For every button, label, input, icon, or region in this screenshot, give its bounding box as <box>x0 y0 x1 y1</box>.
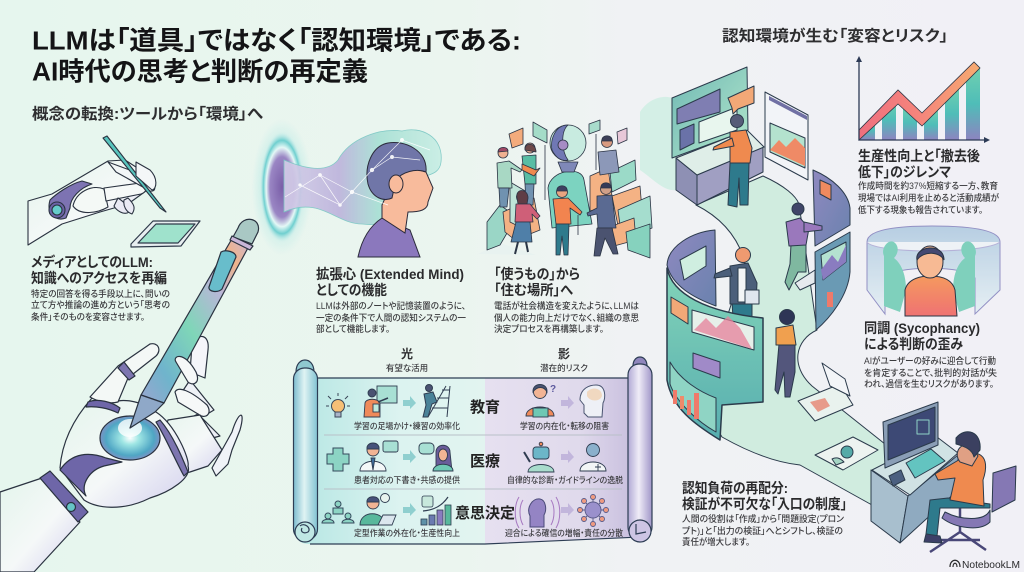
text: cognitive load redistribution: 責任が増大します。 <box>682 536 750 547</box>
chart: productivity zigzag with bars <box>856 56 990 143</box>
icon: echo head <box>515 497 560 528</box>
text: from using to living: 個人の能力向上だけでなく、組織の意思 <box>494 312 639 323</box>
panel: scroll comparing light and shadow <box>294 357 652 544</box>
text: decision label: 意思決定 <box>455 504 515 522</box>
person: walking <box>785 203 822 290</box>
text: extended mind: LLMは外部のノートや記憶装置のように、 <box>316 300 466 311</box>
text: from using to living: 電話が社会構造を変えたように、LLMは <box>494 300 639 311</box>
icon: reader with question <box>526 384 556 417</box>
icon: person surrounded by echo ring <box>867 226 1000 316</box>
text: cognitive load redistribution: 人間の役割は「作成」から「問題設定(プロン <box>682 513 844 524</box>
curved panel: left lower <box>667 268 763 440</box>
logo: NotebookLM: NotebookLM <box>962 559 1020 571</box>
caption: medicine shadow: 自律的な診断・ガイドラインの逸脱 <box>507 475 623 485</box>
person: woman with folder <box>714 248 759 318</box>
icon: medical cross <box>327 448 349 471</box>
icon: small robot hand with stylus <box>28 136 166 245</box>
icon: climbing ladder <box>423 384 450 417</box>
right heading: 認知環境が生む「変容とリスク」 <box>722 26 948 45</box>
text: sycophancy: AIがユーザーの好みに迎合して行動 <box>864 355 996 366</box>
icon: light bulb <box>326 393 350 417</box>
mint wisp <box>640 97 676 190</box>
icon: teacher at board <box>364 386 397 417</box>
text: cognitive load redistribution: 検証が不可欠な「入口の制度」 <box>682 496 847 512</box>
text: extended mind: 部として機能します。 <box>316 323 390 334</box>
side table <box>795 270 815 290</box>
person: operator seated in chair <box>924 432 1016 552</box>
title: AI時代の思考と判断の再定義 <box>32 56 368 86</box>
arrow <box>403 396 416 409</box>
column headings: light and shadow <box>386 346 588 373</box>
column headings: light and shadow: 潜在的リスク <box>540 363 588 373</box>
document on platform <box>798 363 853 421</box>
text: extended mind <box>316 266 466 334</box>
icon: patient with speech bubble <box>419 443 453 471</box>
text: productivity dilemma <box>858 148 999 215</box>
text: extended mind: 一定の条件下で人間の認知システムの一 <box>316 312 466 323</box>
curved panel: right side upper <box>813 170 850 246</box>
text: medicine label: 医療 <box>470 453 500 470</box>
column headings: light and shadow: 有望な活用 <box>386 363 428 373</box>
walkway floor <box>696 176 890 505</box>
text: media as LLM: 立て方や推論の進め方という「思考の <box>31 299 170 310</box>
curved panel: right side lower <box>815 232 850 330</box>
text: media as LLM: 条件」そのものを変容させます。 <box>31 311 145 322</box>
text: productivity dilemma: 低下」のジレンマ <box>858 164 951 180</box>
icon: robot diagnosing <box>524 442 554 472</box>
arrow <box>561 450 574 463</box>
text: from using to living: 決定プロセスを再構築します。 <box>494 323 604 334</box>
text: sycophancy <box>864 320 997 389</box>
text: sycophancy: われ、過信を生むリスクがあります。 <box>864 378 994 389</box>
icon: worker with laptop and gear <box>360 494 396 525</box>
icon: doctor with speech bubble <box>360 441 398 471</box>
icon: people in an AI environment <box>478 120 652 258</box>
text: sycophancy: 同調 (Sycophancy) <box>864 320 980 336</box>
row: education <box>326 384 609 431</box>
column headings: light and shadow: 影 <box>558 347 570 361</box>
scroll right roller <box>628 357 652 542</box>
caption: education light: 学習の足場かけ・練習の効率化 <box>354 421 460 431</box>
caption: education shadow: 学習の内在化・転移の阻害 <box>520 421 609 431</box>
icon: portal with neural flow into head <box>252 119 441 257</box>
text: sycophancy: による判断の歪み <box>864 336 963 352</box>
icon: reader with question: ? <box>550 384 556 395</box>
text: productivity dilemma: 生産性向上と「撤去後 <box>858 148 980 164</box>
title <box>32 26 521 86</box>
text: media as LLM: 知識へのアクセスを再編 <box>31 270 167 286</box>
text: from using to living <box>494 266 639 334</box>
arrow <box>403 450 416 463</box>
text: cognitive load redistribution: プト)」と「出力の検証」へとシフトし、検証の <box>682 525 843 536</box>
text: productivity dilemma: 現場ではAI利用を止めると活動成績が <box>858 192 999 203</box>
title: LLMは「道具」ではなく「認知環境」である: <box>32 26 521 56</box>
text: cognitive load redistribution <box>682 480 847 547</box>
text: from using to living: 「使うもの」から <box>494 266 580 282</box>
person: woman walking <box>775 310 796 397</box>
text: productivity dilemma: 作成時間を約37%短縮する一方、教育 <box>858 180 998 191</box>
text: education label: 教育 <box>470 399 500 416</box>
person: man at desk <box>713 114 752 207</box>
text: sycophancy: を肯定することで、批判的対話が失 <box>864 367 997 378</box>
text: media as LLM <box>31 254 170 322</box>
top workstation <box>672 67 808 205</box>
text: media as LLM: メディアとしてのLLM: <box>31 254 153 270</box>
arrow <box>561 503 574 516</box>
subtitle: concept shift: 概念の転換:ツールから「環境」へ <box>32 105 263 123</box>
text: cognitive load redistribution: 認知負荷の再配分: <box>682 480 788 496</box>
arrow <box>561 396 574 409</box>
icon: head with brain <box>580 385 605 417</box>
caption: decision light: 定型作業の外在化・生産性向上 <box>354 528 460 538</box>
scroll left roller <box>294 360 318 542</box>
row: medicine <box>327 441 623 485</box>
caption: decision shadow: 迎合による確信の増幅・責任の分散 <box>505 528 623 538</box>
text: extended mind: 拡張心 (Extended Mind) <box>316 266 464 282</box>
icon: doctor with mask <box>580 444 606 471</box>
curved panel: left upper <box>667 230 716 306</box>
gear card on floor <box>815 437 878 470</box>
icon: org chart <box>322 501 354 523</box>
icon: tablet <box>131 221 200 247</box>
text: media as LLM: 特定の回答を得る手段以上に、問いの <box>31 288 170 299</box>
illustration: isometric path through cognitive environment <box>640 67 1016 552</box>
icon: productivity chart <box>421 496 451 525</box>
text: extended mind: としての機能 <box>316 282 387 298</box>
column headings: light and shadow: 光 <box>401 346 413 361</box>
row: decision making <box>322 494 623 538</box>
icon: large robot hand holding pen <box>0 219 259 572</box>
text: from using to living: 「住む場所」へ <box>494 282 573 298</box>
icon: distributed network <box>578 494 608 526</box>
arrow <box>403 503 416 516</box>
bottom workstation <box>871 402 958 543</box>
text: productivity dilemma: 低下する現象も報告されています。 <box>858 204 983 215</box>
caption: medicine light: 患者対応の下書き・共感の提供 <box>354 475 460 485</box>
